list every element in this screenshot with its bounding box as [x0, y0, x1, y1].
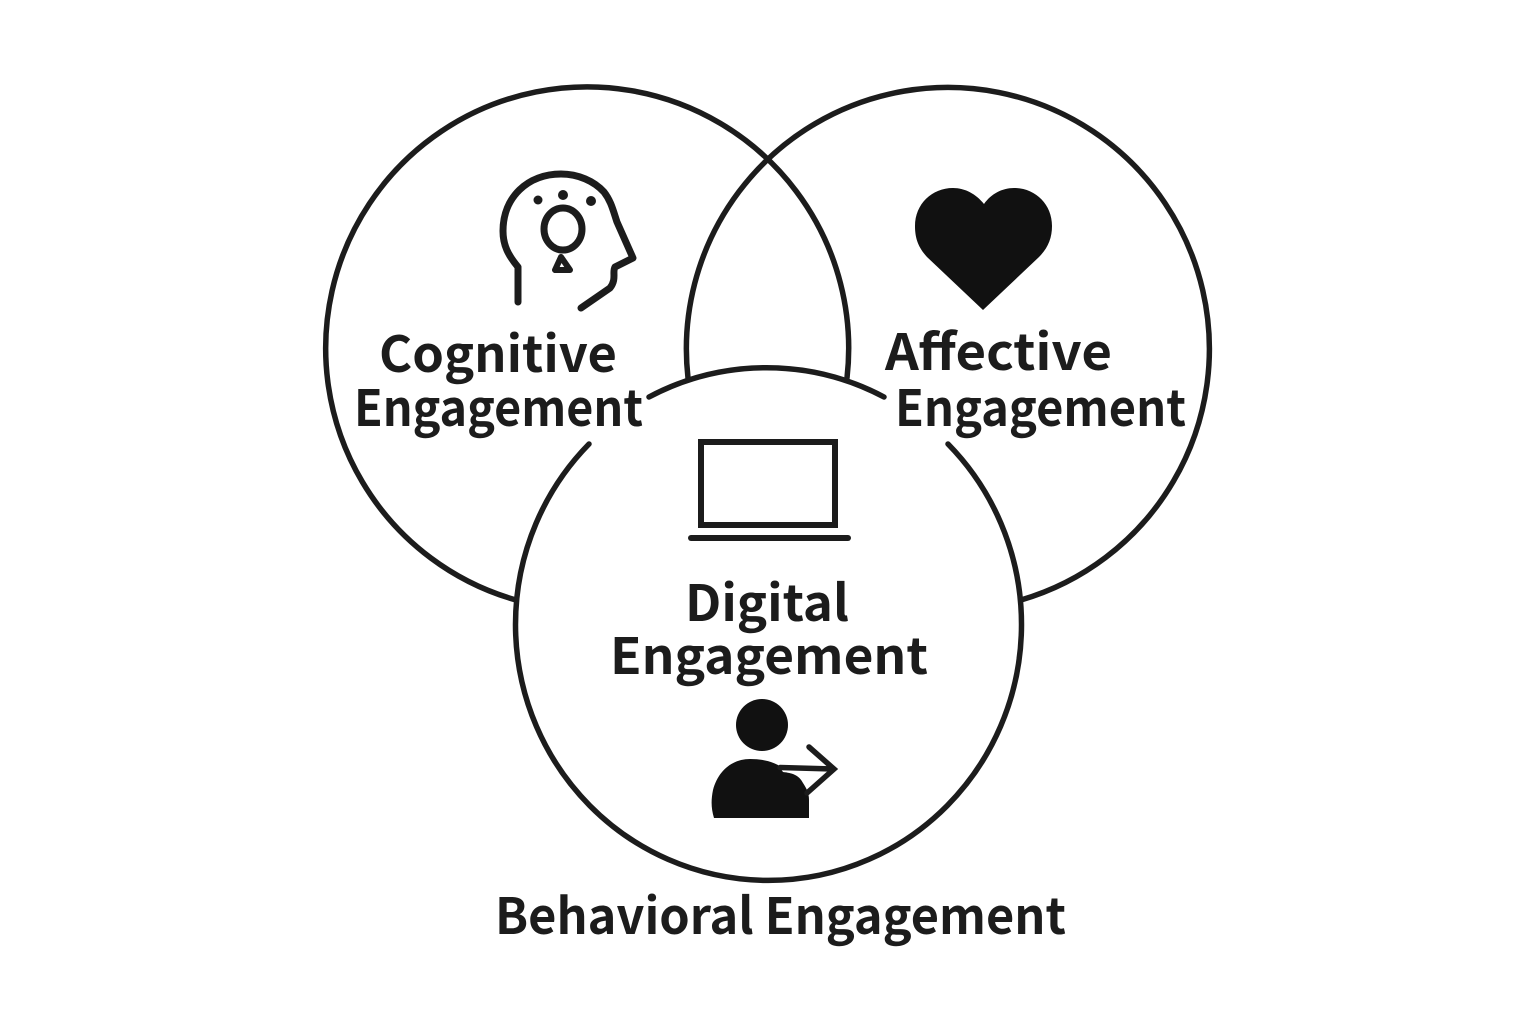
label: digital engagement: Engagement: [610, 617, 928, 689]
label: cognitive engagement: [354, 315, 643, 441]
icon: heart: [915, 188, 1052, 310]
circle: affective engagement: [686, 87, 1209, 600]
icon: head with lightbulb: [503, 174, 633, 308]
label: digital engagement: Digital: [685, 564, 849, 636]
label: cognitive engagement: Engagement: [354, 369, 643, 441]
label: affective engagement: Affective: [884, 313, 1112, 385]
label: behavioral engagement: Behavioral Engagement: [495, 877, 1066, 949]
label: digital engagement: [610, 564, 928, 689]
circle: cognitive engagement: [326, 87, 849, 600]
label: cognitive engagement: Cognitive: [379, 315, 617, 387]
label: affective engagement: [884, 313, 1186, 441]
circle: behavioral engagement: [516, 368, 1022, 880]
icon: person with arrow: [712, 699, 834, 818]
icon: laptop: [691, 442, 848, 538]
label: affective engagement: Engagement: [895, 369, 1186, 441]
